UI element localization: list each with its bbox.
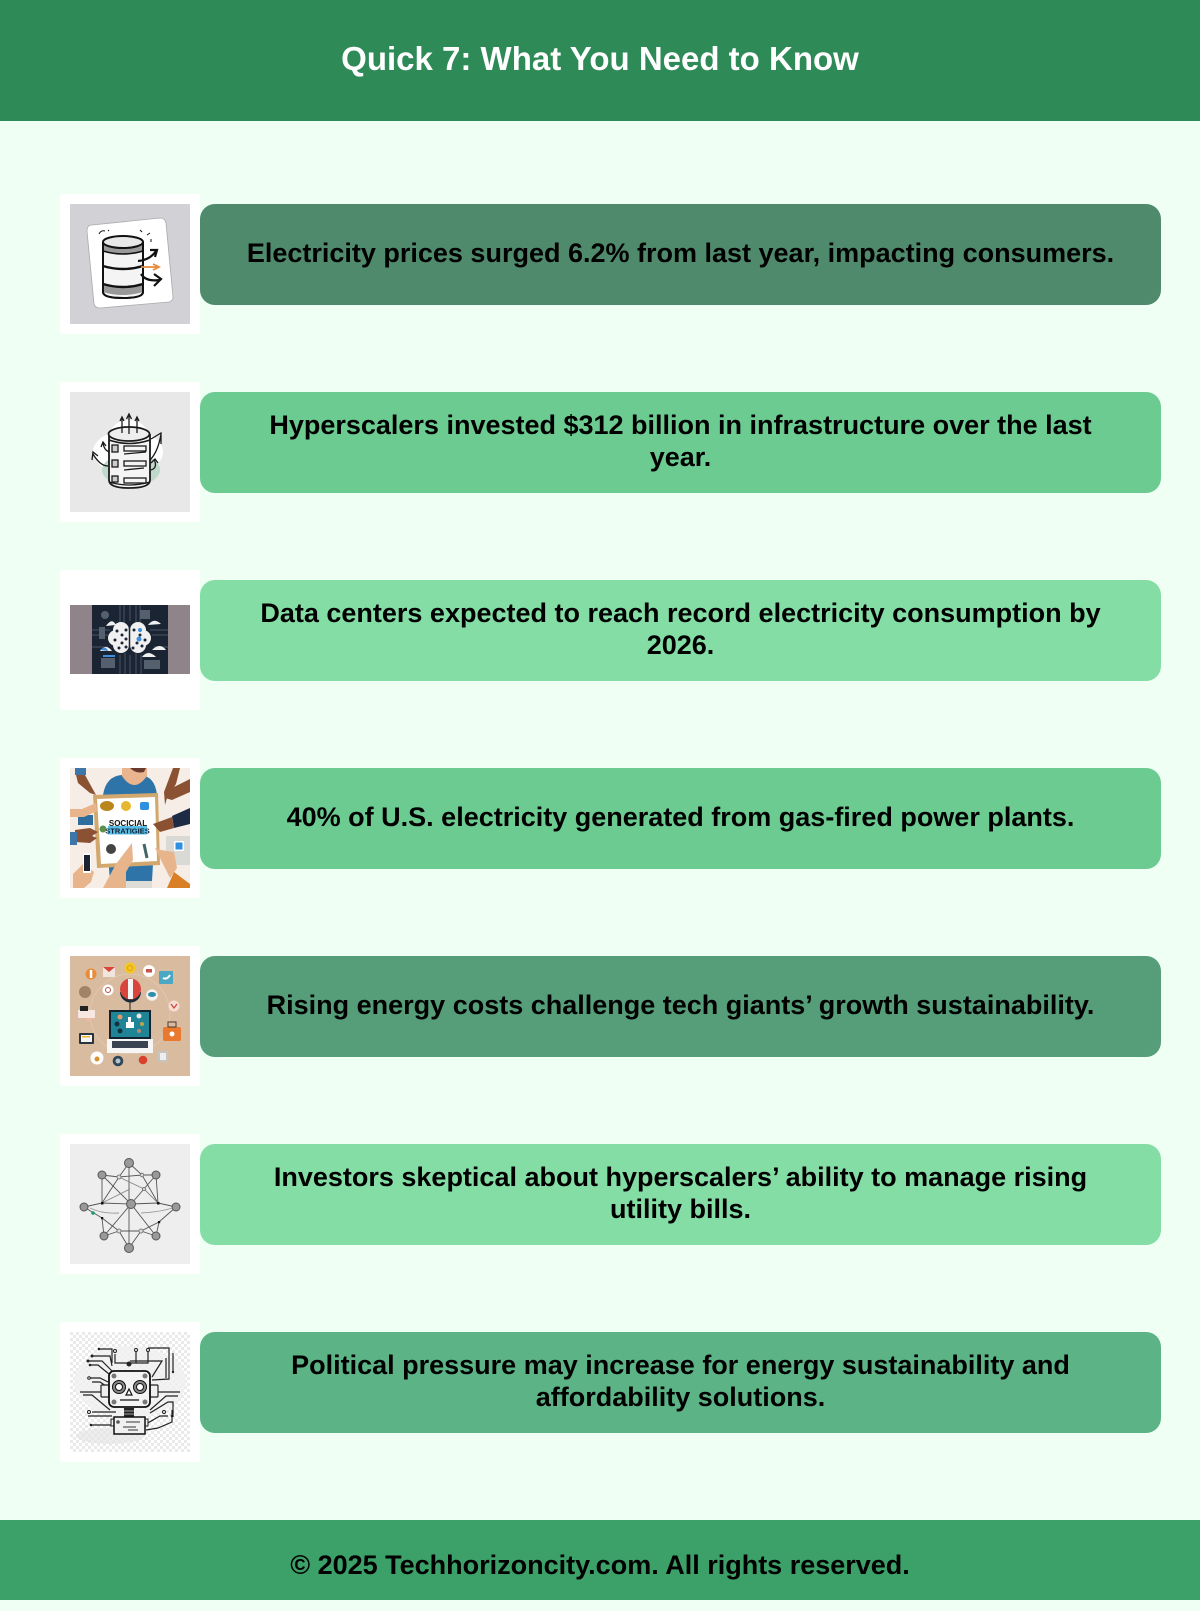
panel: item 2 hyperscaler investment — [60, 382, 1161, 522]
text bar: 40% of U.S. electricity generated from gas-fired power plants. — [287, 802, 1074, 832]
text bar — [200, 768, 1161, 869]
text bar: Investors skeptical about hyperscalers’ ability to manage rising utility bills. — [274, 1162, 1087, 1224]
text bar — [200, 204, 1161, 305]
footer: © 2025 Techhorizoncity.com. All rights reserved. — [290, 1550, 910, 1580]
icon: network graph — [60, 1134, 200, 1274]
text bar: Hyperscalers invested $312 billion in infrastructure over the last year. — [269, 410, 1092, 472]
text bar: Rising energy costs challenge tech giants’ growth sustainability. — [267, 990, 1094, 1020]
text bar: Political pressure may increase for energy sustainability and affordability solutions. — [291, 1350, 1070, 1412]
panel: item 6 investors skeptical — [60, 1134, 1161, 1274]
panel: item 4 gas-fired power — [60, 758, 1161, 898]
panel: item 7 political pressure — [60, 1322, 1161, 1462]
title: Quick 7: What You Need to Know — [341, 40, 859, 77]
text bar — [200, 392, 1161, 493]
icon: AI brain circuit image — [60, 570, 200, 710]
icon: hands around strategy board: STRATIGIES — [105, 826, 150, 836]
icon: robot with circuit lines — [60, 1322, 200, 1462]
panel: item 1 electricity prices — [60, 194, 1161, 334]
text bar — [200, 1332, 1161, 1433]
panel: item 3 data center consumption — [60, 570, 1161, 710]
text bar: Data centers expected to reach record electricity consumption by 2026. — [260, 598, 1101, 660]
icon: database with arrows — [60, 194, 200, 334]
text bar — [200, 956, 1161, 1057]
icon: hands around strategy board: SOCICIAL — [109, 819, 147, 828]
text bar: Electricity prices surged 6.2% from last year, impacting consumers. — [247, 238, 1114, 268]
text bar — [200, 580, 1161, 681]
icon: server cylinder with arrows — [60, 382, 200, 522]
title — [0, 0, 1200, 121]
panel: item 5 energy costs — [60, 946, 1161, 1086]
icon: laptop with social media icons — [60, 946, 200, 1086]
icon: hands around strategy board — [60, 758, 200, 898]
text bar — [200, 1144, 1161, 1245]
footer — [0, 1520, 1200, 1600]
